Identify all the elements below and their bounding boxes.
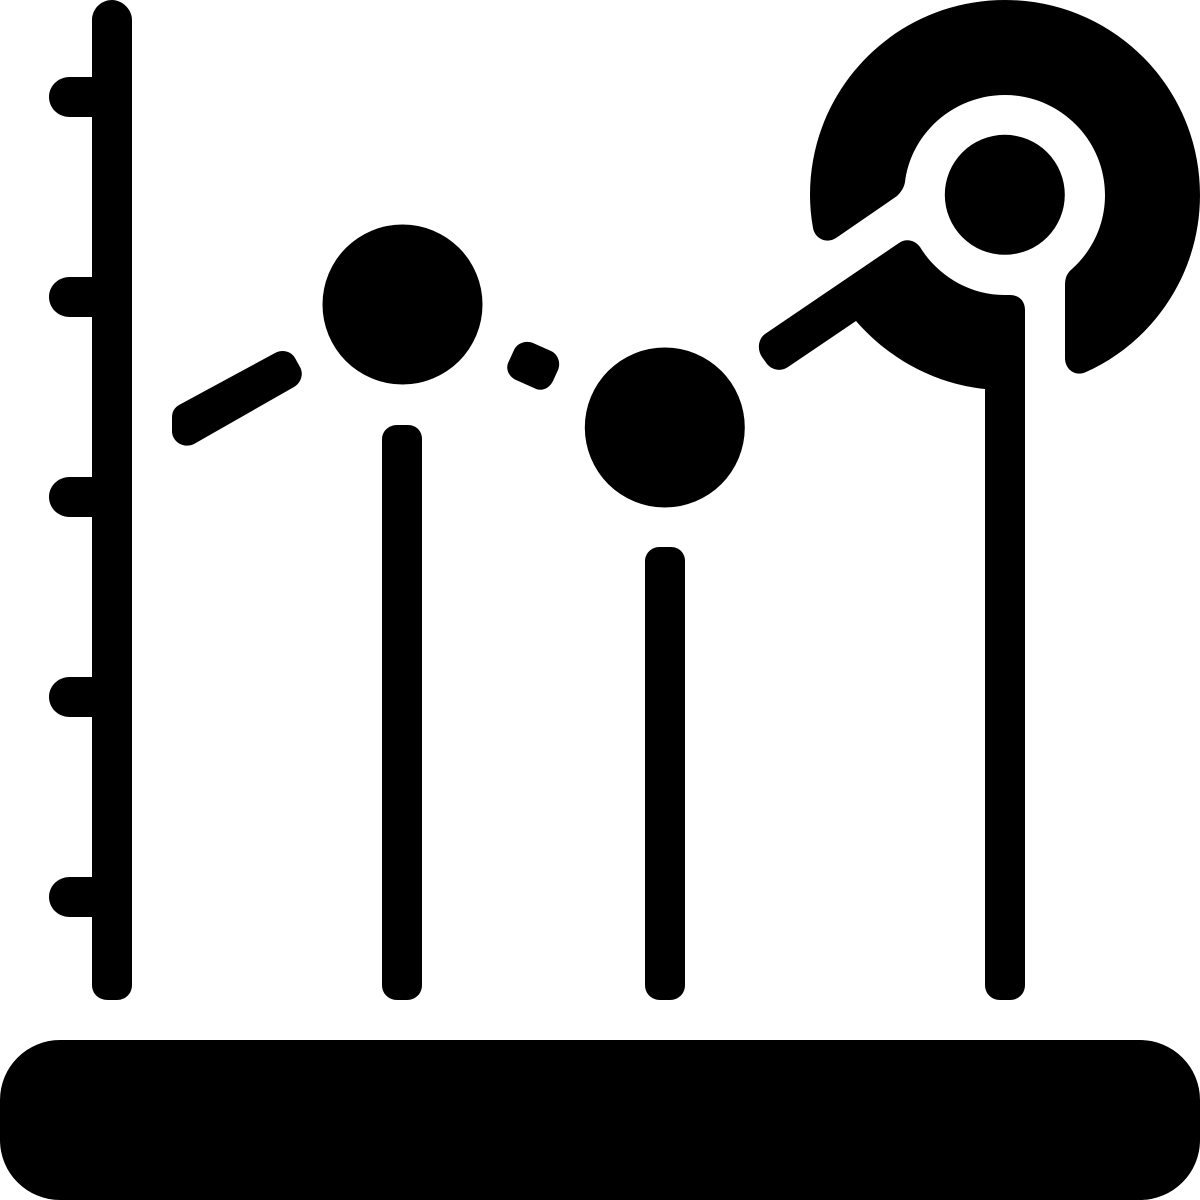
icon: first data point [322,224,482,384]
icon: first line segment [172,351,302,446]
icon: base bar [0,1040,1200,1200]
icon: second bar [645,547,685,1000]
icon: centre dot [945,135,1065,255]
icon: second line segment [507,342,559,390]
icon: vertical axis with ticks [49,0,132,1000]
icon: first bar [382,425,422,1000]
icon: third line segment and tall bar [759,240,1025,1000]
icon: second data point [585,348,745,508]
icon: open ring [810,0,1200,374]
